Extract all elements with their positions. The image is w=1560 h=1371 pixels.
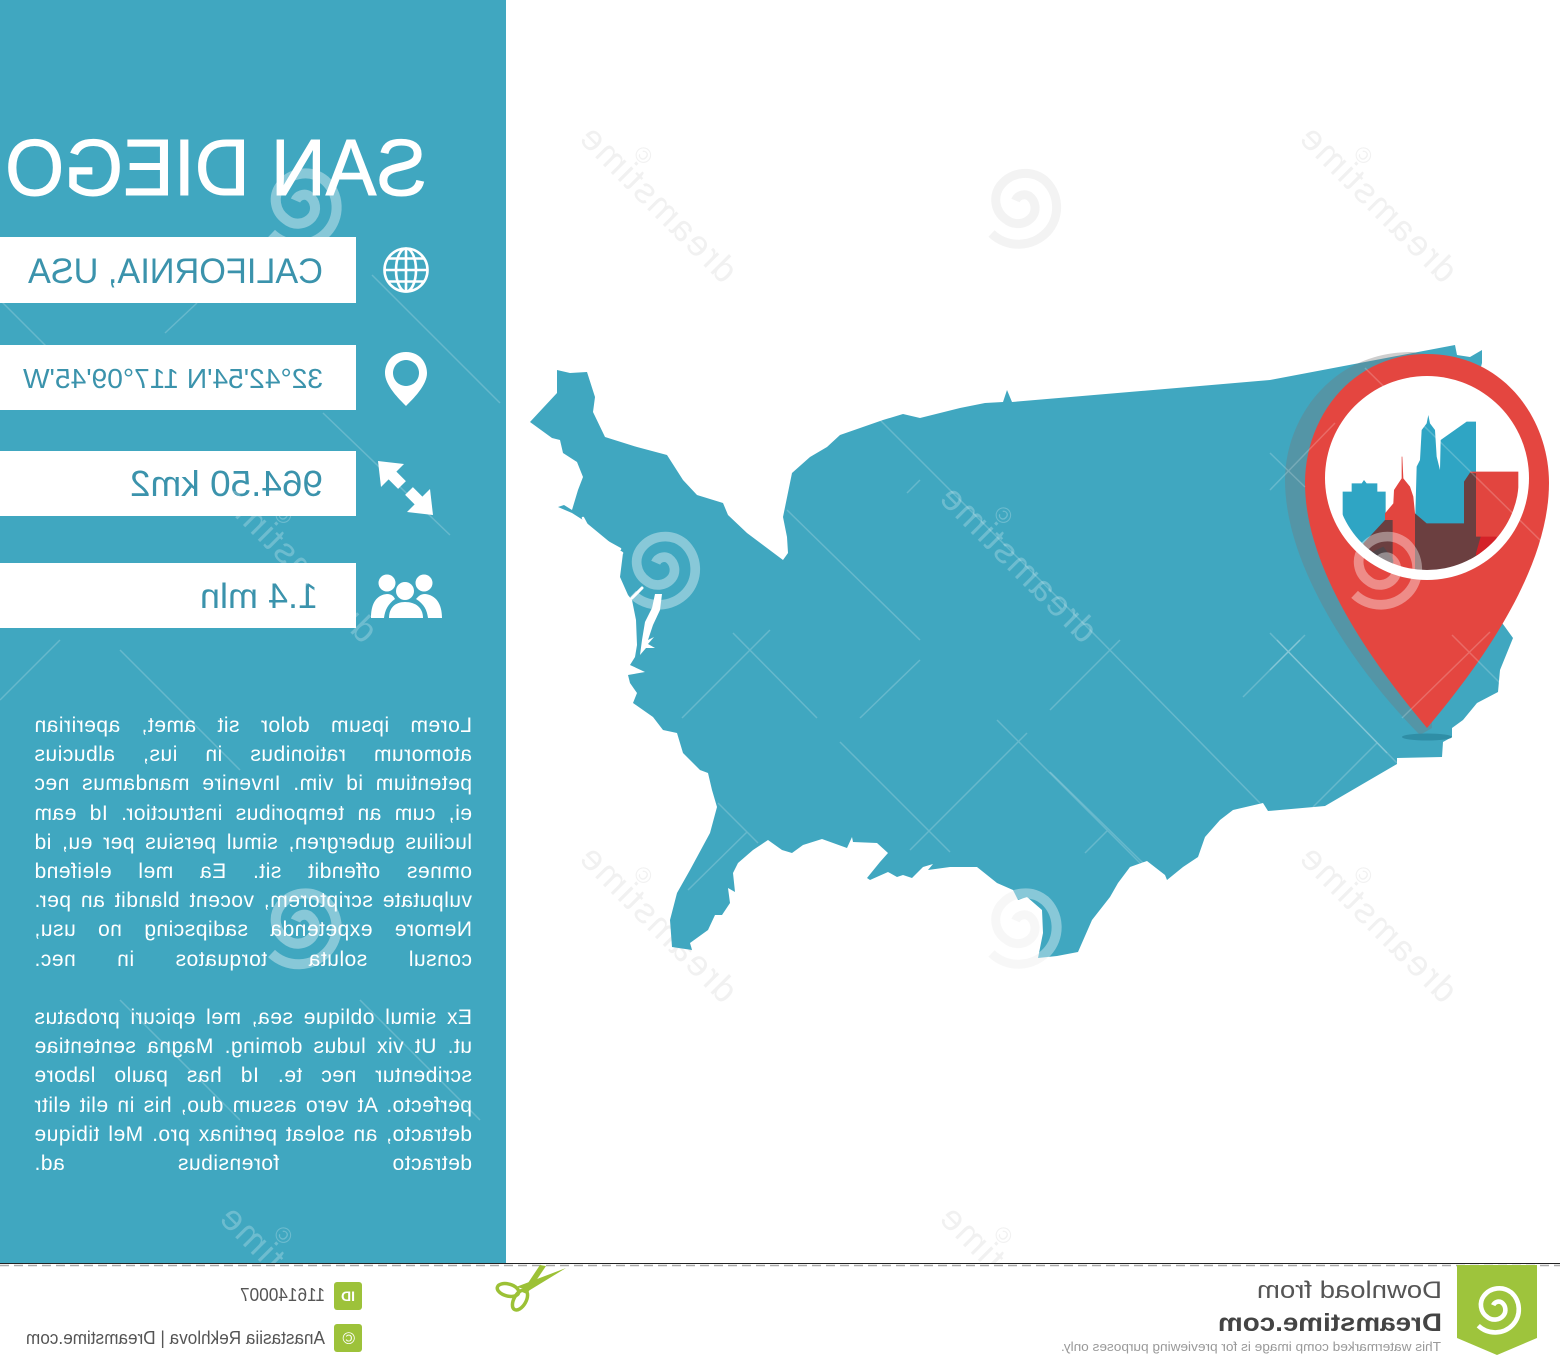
text block: second paragraph: detracto, an soleat pertinax pro. Mel tibique — [34, 1123, 472, 1146]
map: USA silhouette — [530, 345, 1513, 958]
dreamstime brand name: Dreamstime.com — [1218, 1309, 1442, 1337]
watermark layer over coloured shapes: © — [269, 1221, 298, 1250]
info row: location — [0, 237, 356, 303]
watermark layer on white background: dreamstime — [572, 117, 746, 291]
icon: resize arrows — [378, 461, 433, 515]
info row: area: 964.50 km2 — [130, 463, 323, 504]
map pin: cast shadow — [1285, 352, 1432, 735]
watermark layer on white background: dreamstime — [932, 1197, 1106, 1371]
badge: image id — [334, 1282, 362, 1310]
info row: coordinates — [0, 345, 356, 410]
watermark layer on white background: © — [989, 501, 1018, 530]
watermark disclaimer: This watermarked comp image is for previewing purposes only. — [1061, 1340, 1441, 1354]
panel: left sidebar background — [0, 0, 506, 1264]
watermark layer over coloured shapes: dreamstime — [212, 1197, 386, 1371]
text block: second paragraph: scribentur nec te. Id has paulo labore — [34, 1064, 472, 1087]
text block: first paragraph: Lorem ipsum dolor sit amet, aperirian — [34, 714, 472, 737]
watermark layer over coloured shapes: dreamstime — [932, 477, 1106, 651]
watermark layer on white background: dreamstime — [932, 477, 1106, 651]
text block: first paragraph: omnes offendit sit. Ea mel eleifend — [34, 860, 472, 883]
text block: first paragraph: Nemore expetenda sadipscing no usu, — [34, 918, 472, 941]
watermark layer on white background: dreamstime — [1292, 117, 1466, 291]
watermark layer on white background: dreamstime — [572, 837, 746, 1011]
info row: population: 1.4 mln — [200, 577, 318, 616]
text block: first paragraph: vulputate scriptorem, vocent blandit an per. — [34, 889, 472, 912]
map pin: marker — [1305, 354, 1549, 728]
watermark layer on white background: © — [1349, 141, 1378, 170]
text block: second paragraph: ut. Ut vix ludus doming. Magna sententiae — [34, 1035, 472, 1058]
icon: green ribbon with spiral — [1457, 1265, 1537, 1355]
badge: copyright — [334, 1324, 362, 1352]
watermark layer over coloured shapes: © — [989, 501, 1018, 530]
watermark layer on white background: © — [1349, 861, 1378, 890]
watermark layer on white background: © — [629, 141, 658, 170]
watermark layer on white background: © — [629, 861, 658, 890]
footer: download strip — [0, 1264, 1560, 1371]
watermark layer over coloured shapes: dreamstime — [212, 477, 386, 651]
text block: second paragraph: Ex simul oblique sea, mel epicuri probatus — [34, 1006, 472, 1029]
watermark layer on white background: © — [989, 1221, 1018, 1250]
watermark layer on white background: dreamstime — [1292, 837, 1466, 1011]
icon: globe — [384, 248, 428, 292]
text block: first paragraph: lucilius gubergren, simul persius per eu, id — [34, 831, 472, 854]
text block: first paragraph: consul soluta torquatos in nec. — [34, 948, 472, 970]
map pin: tip shadow — [1402, 734, 1452, 740]
image id number: 116140007 — [240, 1285, 325, 1305]
copyright credit: Anastasiia Rekhlova | Dreamstime.com — [26, 1328, 325, 1348]
download from label: Download from — [1257, 1277, 1442, 1304]
info row: coordinates: 32°42'54'N 117°09'45'W — [22, 363, 323, 394]
icon: scissors — [496, 1265, 566, 1313]
info row: location: CALIFORNIA, USA — [27, 252, 323, 291]
info row: area — [0, 451, 356, 516]
badge: image id: ID — [341, 1288, 355, 1304]
watermark layer on white background — [572, 106, 1477, 1371]
text block: second paragraph: perfecto. At vero assum duo, his in elit elitr — [34, 1094, 472, 1117]
bays and sound cut-outs — [583, 518, 662, 655]
text block: first paragraph: atomorum rationibus in ius, albucius — [34, 743, 472, 766]
text block: second paragraph: detracto forensibus ad. — [34, 1152, 472, 1175]
icon: people — [371, 574, 442, 618]
text block: second paragraph — [34, 1006, 472, 1175]
icon: city skyline — [1343, 415, 1518, 580]
badge: copyright: © — [342, 1329, 355, 1348]
text block: first paragraph: petentium id vim. Invenire mandamus nec — [34, 772, 472, 795]
info row: population — [0, 563, 356, 628]
watermark layer over coloured shapes: © — [269, 501, 298, 530]
text block: first paragraph: ei, cum an temporibus instructior. Id eam — [34, 802, 472, 825]
icon: location pin — [385, 352, 427, 406]
text block: first paragraph — [34, 714, 472, 970]
